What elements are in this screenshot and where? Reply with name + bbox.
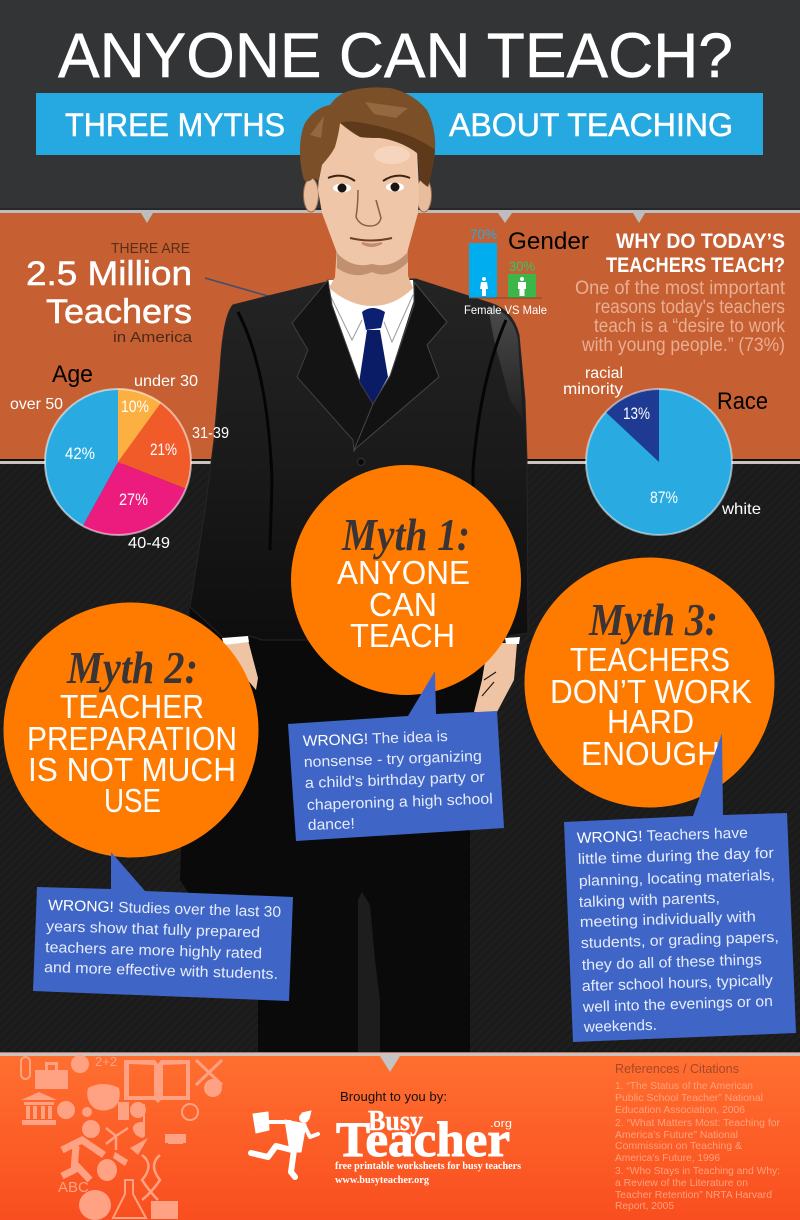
callout: myth 2 answer: and more effective with students. (44, 959, 278, 983)
icon: atom (182, 1104, 198, 1120)
race labels: white (721, 501, 761, 518)
panel: myth 2 (4, 602, 258, 858)
icon: open book (124, 1060, 190, 1103)
icon: small book (151, 1201, 178, 1219)
heading: age: Age (52, 361, 93, 388)
right hand (474, 643, 517, 712)
age labels: 31-39 (192, 425, 229, 442)
chart: age pie (45, 389, 191, 535)
age labels: 40-49 (128, 535, 170, 552)
eyebrows (328, 176, 410, 181)
icon: large circle (97, 1159, 117, 1181)
chart: age pie: 21% (150, 440, 177, 459)
heading: why do teachers teach: WHY DO TODAY’S (616, 230, 785, 253)
callout: myth 2 answer: teachers are more highly rated (45, 939, 262, 962)
shirt collar lines (330, 295, 413, 342)
heading: gender: Gender (508, 228, 589, 255)
panel: myth 2: USE (104, 782, 161, 819)
panel: myth 1: TEACH (350, 617, 455, 654)
leader line to teacher (205, 278, 268, 296)
references list: a Review of the Literature on (615, 1177, 748, 1189)
callout: myth 2 answer: WRONG! Studies over the last 30 (48, 897, 281, 921)
icon: clock (130, 1102, 146, 1118)
chart: age pie: 27% (119, 490, 148, 509)
icon: paperclip (21, 1057, 30, 1079)
callout: myth 3 answer: after school hours, typically (582, 972, 774, 995)
jacket lapels (292, 280, 447, 452)
icon: people group (165, 1134, 186, 1144)
chin shadow (337, 247, 408, 275)
neck (329, 245, 413, 306)
callout: myth 3 answer: meeting individually with (580, 908, 756, 931)
callout: myth 1 answer: a child's birthday party or (305, 769, 485, 792)
sleeve seams (238, 312, 506, 550)
panel: myth 3 (524, 558, 774, 808)
references list: 1. “The Status of the American (615, 1080, 753, 1092)
callout: myth 3 answer: WRONG! Teachers have (577, 825, 748, 847)
references list: Report, 2005 (615, 1200, 674, 1212)
chart: gender bars: 30% (509, 258, 535, 274)
subtitle banner: THREE MYTHS (65, 107, 285, 143)
forehead highlight (374, 146, 410, 164)
jacket button (358, 458, 364, 466)
chart: race pie: 13% (623, 404, 650, 423)
callout: myth 3 answer (564, 733, 796, 1042)
references list: Commission on Teaching & (615, 1140, 742, 1152)
references list: 2. “What Matters Most: Teaching for (615, 1117, 780, 1129)
panel: myth 3: HARD (607, 703, 694, 740)
panel: myth 2: IS NOT MUCH (28, 751, 236, 788)
icon: molecule (106, 1128, 128, 1150)
hair (300, 87, 435, 187)
panel: dark myths background (0, 464, 800, 1053)
logo: running teacher icon (251, 1111, 318, 1177)
nose (356, 190, 381, 226)
callout: myth 3 answer: they do all of these things (582, 951, 762, 974)
text block: teacher count: THERE ARE (111, 240, 190, 257)
callout: myth 3 answer: well into the evenings or on (582, 993, 773, 1016)
label: ABC: ABC (58, 1179, 89, 1196)
gap between legs (358, 892, 380, 1052)
footer divider (0, 1052, 800, 1072)
logo: wordmark: free printable worksheets for busy teachers (335, 1161, 521, 1172)
credit line: Brought to you by: (340, 1089, 447, 1104)
panel: stats band (0, 213, 800, 459)
callout: myth 1 answer: chaperoning a high school (307, 791, 493, 814)
chart: race pie: 87% (650, 488, 678, 507)
references list (615, 1080, 780, 1212)
icon: big ball (79, 1190, 111, 1220)
ears (304, 178, 432, 212)
label: 2+2: 2+2 (95, 1054, 117, 1069)
panel: myth 3: Myth 3: (588, 594, 718, 645)
callout: myth 3 answer: weekends. (583, 1017, 657, 1036)
icon: calculator (118, 1102, 129, 1120)
text block: teacher motivation (575, 278, 786, 356)
callout: myth 3 answer: talking with parents, (579, 890, 720, 911)
eyes (333, 182, 404, 192)
text block: teacher count: 2.5 Million (26, 255, 192, 293)
age labels: under 30 (134, 373, 198, 390)
references list: Education Association, 2006 (615, 1104, 745, 1116)
chart: gender bars: 70% (470, 226, 497, 242)
references heading: References / Citations (615, 1062, 739, 1076)
panel: myth 3: TEACHERS (570, 641, 730, 678)
chart: race pie (586, 389, 732, 535)
references list: 3. “Who Stays in Teaching and Why: (615, 1165, 780, 1177)
callout: myth 3 answer: students, or grading papers, (581, 929, 779, 952)
text block: teacher motivation: One of the most important (575, 278, 786, 299)
panel: myth 1: CAN (369, 586, 437, 623)
race labels: racial (585, 365, 623, 382)
icon: music note (133, 1104, 145, 1138)
panel: myth 1: Myth 1: (341, 509, 470, 560)
references list: America’s Future” National (615, 1129, 738, 1141)
panel: myth 3: ENOUGH (581, 735, 720, 772)
callout: myth 2 answer: years show that fully prepared (46, 918, 260, 941)
logo: wordmark: www.busyteacher.org (335, 1175, 429, 1186)
left hand (224, 640, 258, 690)
icon: gear (82, 1107, 92, 1117)
logo: wordmark: Busy (368, 1106, 423, 1137)
text block: teacher count: in America (113, 329, 193, 346)
logo: wordmark (335, 1106, 521, 1186)
face (318, 118, 419, 265)
panel: myth 3: DON’T WORK (550, 673, 752, 710)
chart: age pie: 42% (65, 444, 95, 463)
callout: myth 3 answer: planning, locating materials, (579, 867, 775, 890)
text block: teacher count: Teachers (46, 293, 192, 331)
icon: circle shape (82, 1120, 100, 1138)
icon: flask (113, 1180, 146, 1218)
panel: myth 1: ANYONE (337, 554, 470, 591)
cuffs (222, 636, 520, 645)
subtitle banner: ABOUT TEACHING (449, 107, 733, 143)
lower body and trousers (180, 600, 500, 1052)
icon: apple (87, 1084, 120, 1110)
text block: teacher motivation: with young people.” (73%) (581, 335, 785, 356)
references list: Teacher Retention” NRTA Harvard (615, 1189, 772, 1201)
title: ANYONE CAN TEACH? (58, 21, 733, 91)
callout: myth 2 answer (33, 852, 293, 1001)
callout: myth 3 answer: little time during the day for (578, 845, 774, 868)
icon: telescope (113, 1152, 128, 1166)
panel: footer (0, 1056, 800, 1220)
icon: running person (62, 1140, 104, 1180)
logo: wordmark: Teacher (336, 1111, 510, 1167)
icons: school supplies (21, 1054, 222, 1220)
callout: myth 1 answer: dance! (308, 815, 355, 834)
icon: briefcase (35, 1062, 68, 1089)
heading: race: Race (717, 388, 768, 415)
logo: wordmark: .org (490, 1118, 512, 1130)
icon: male figure (518, 277, 526, 296)
icon: lab globe (57, 1101, 75, 1119)
shirt (328, 280, 414, 403)
callout: myth 1 answer: nonsense - try organizing (304, 748, 482, 771)
icon: globe (204, 1079, 222, 1097)
right shoulder highlight (488, 306, 523, 420)
icon: palette (71, 1055, 89, 1073)
panel: myth 1 (291, 465, 521, 695)
icon: scissors (196, 1060, 222, 1085)
icon: ruler (130, 1138, 148, 1155)
band dividers (0, 208, 800, 464)
chart: gender bars: Female VS Male (464, 303, 547, 317)
references list: Public School Teacher” National (615, 1092, 763, 1104)
panel: myth 2: TEACHER (60, 688, 204, 725)
text block: teacher count (26, 240, 193, 346)
suit jacket (190, 279, 528, 640)
callout: myth 1 answer: WRONG! The idea is (303, 728, 448, 750)
icon: dna helix (142, 1155, 160, 1200)
illustration: teacher figure (180, 87, 528, 1052)
panel: myth 2: PREPARATION (27, 720, 237, 757)
mouth (350, 238, 392, 246)
race labels (563, 365, 761, 518)
necktie (359, 308, 388, 404)
references list: America’s Future, 1996 (615, 1152, 720, 1164)
age labels (10, 373, 229, 552)
heading: why do teachers teach (606, 230, 785, 277)
icon: bank (21, 1092, 57, 1125)
race labels: minority (563, 381, 623, 398)
age labels: over 50 (10, 396, 63, 413)
icon: female figure (480, 277, 488, 296)
text block: teacher motivation: teach is a “desire to work (594, 316, 785, 337)
chart: gender bars (464, 226, 547, 317)
subtitle banner (36, 93, 763, 155)
chart: age pie: 10% (121, 397, 149, 416)
header background (0, 0, 800, 210)
callout: myth 1 answer (288, 671, 504, 841)
panel: myth 2: Myth 2: (66, 642, 198, 693)
text block: teacher motivation: reasons today's teachers (595, 297, 785, 318)
